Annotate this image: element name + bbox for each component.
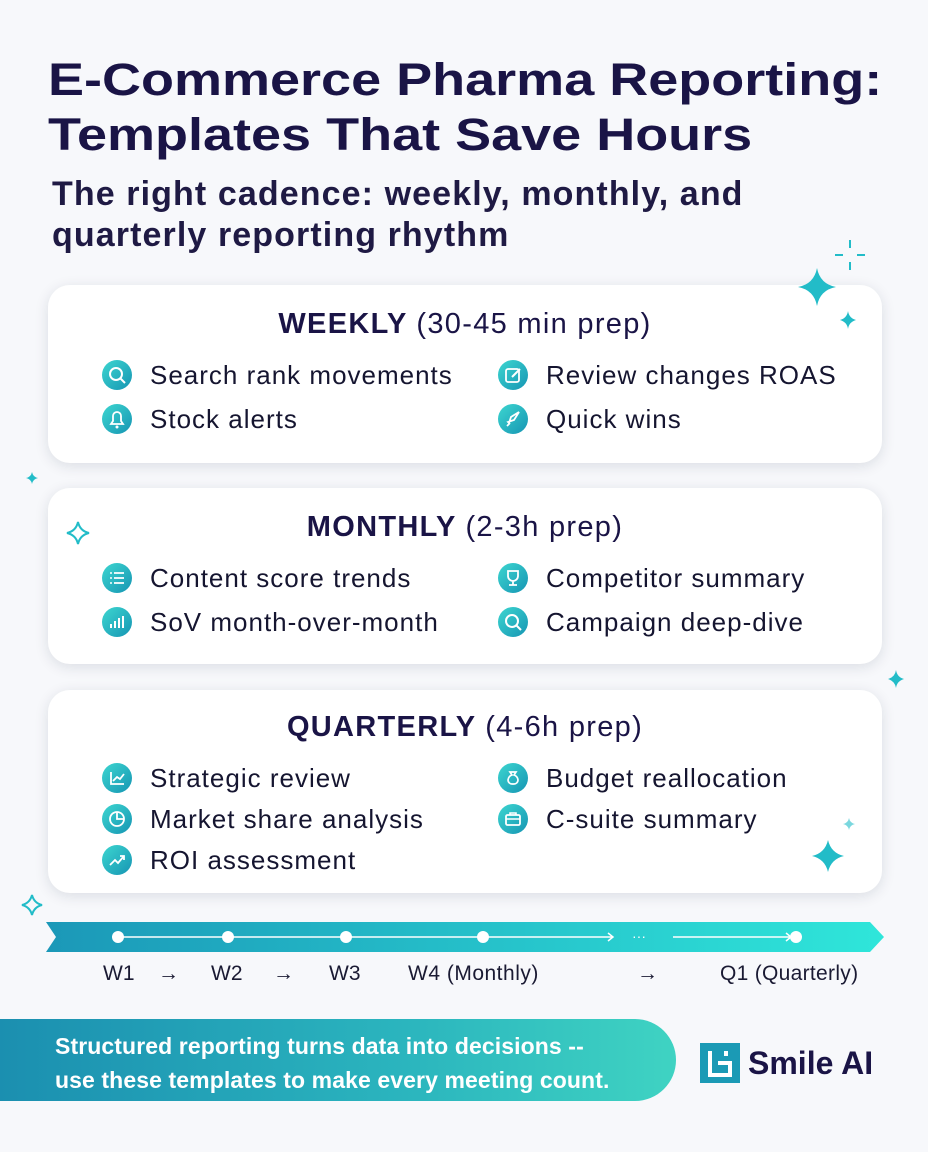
- timeline labels: [103, 962, 858, 985]
- title: Templates That Save Hours: [48, 109, 752, 160]
- item: content score: Content score trends: [150, 563, 411, 593]
- item: roi: ROI assessment: [150, 845, 356, 875]
- logo: [700, 1043, 873, 1083]
- item: budget: Budget reallocation: [546, 763, 788, 793]
- timeline labels: W3: [329, 962, 360, 985]
- item: strategic review: Strategic review: [150, 763, 351, 793]
- timeline labels: W1: [103, 962, 134, 985]
- item: quick wins: Quick wins: [546, 404, 682, 434]
- heading: monthly: MONTHLY (2-3h prep): [307, 511, 623, 543]
- item: stock alerts: Stock alerts: [150, 404, 298, 434]
- title: [48, 54, 882, 160]
- logo: Smile AI: [748, 1045, 873, 1081]
- timeline band: [46, 922, 884, 952]
- heading: weekly: WEEKLY (30-45 min prep): [278, 308, 652, 340]
- bottom banner: [0, 1019, 676, 1101]
- subtitle: quarterly reporting rhythm: [52, 216, 509, 254]
- item: market share: Market share analysis: [150, 804, 424, 834]
- item: search rank: Search rank movements: [150, 360, 453, 390]
- card: weekly: [48, 285, 882, 463]
- timeline labels: W4 (Monthly): [408, 962, 539, 985]
- subtitle: [52, 175, 744, 254]
- timeline labels: W2: [211, 962, 242, 985]
- heading: quarterly: QUARTERLY (4-6h prep): [287, 711, 643, 743]
- item: competitor: Competitor summary: [546, 563, 805, 593]
- item: review changes: Review changes ROAS: [546, 360, 837, 390]
- bottom banner: Structured reporting turns data into decisions --: [55, 1033, 584, 1059]
- title: E-Commerce Pharma Reporting:: [48, 54, 882, 105]
- card: monthly: [48, 488, 882, 664]
- timeline labels: →: [637, 962, 658, 985]
- item: c-suite: C-suite summary: [546, 804, 757, 834]
- card: quarterly: [48, 690, 882, 893]
- timeline labels: →: [273, 962, 294, 985]
- bottom banner: use these templates to make every meeting count.: [55, 1067, 609, 1093]
- timeline band: ···: [632, 928, 646, 944]
- item: campaign: Campaign deep-dive: [546, 607, 804, 637]
- subtitle: The right cadence: weekly, monthly, and: [52, 175, 744, 213]
- logo icon: [700, 1043, 740, 1083]
- timeline labels: →: [158, 962, 179, 985]
- timeline labels: Q1 (Quarterly): [720, 962, 858, 985]
- item: sov: SoV month-over-month: [150, 607, 439, 637]
